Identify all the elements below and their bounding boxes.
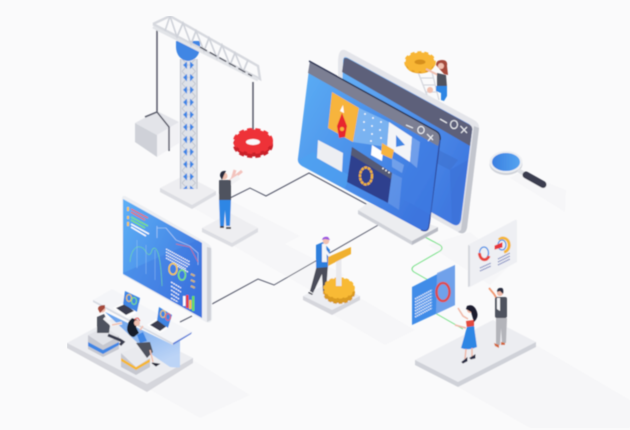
blue ring card bbox=[412, 265, 455, 325]
person looking at gear bbox=[219, 170, 242, 229]
crane bbox=[135, 16, 260, 189]
bar chart bbox=[183, 295, 194, 311]
back window controls bbox=[440, 119, 467, 133]
small cards bbox=[371, 143, 404, 173]
floor shadows bbox=[147, 172, 630, 428]
woman presenting bbox=[455, 305, 478, 363]
mini legend bbox=[191, 274, 195, 288]
front window controls bbox=[406, 125, 433, 141]
yellow gear bbox=[406, 52, 434, 74]
donut right bbox=[495, 238, 509, 252]
person platform near crane bbox=[202, 213, 258, 247]
yellow gear bbox=[324, 278, 354, 303]
desk bbox=[93, 289, 192, 368]
dark code window bbox=[347, 147, 392, 203]
crossbar bbox=[328, 247, 351, 266]
woman on ladder bbox=[426, 60, 448, 101]
play card bbox=[387, 122, 420, 168]
caption lines bbox=[480, 253, 510, 271]
post bbox=[336, 256, 342, 286]
desk cable bbox=[180, 316, 192, 322]
worker with gear machine bbox=[308, 237, 354, 303]
text block bbox=[166, 249, 190, 272]
donut charts bbox=[169, 264, 186, 280]
tower mast bbox=[180, 59, 198, 189]
analytics board bbox=[122, 196, 212, 323]
bell chart bbox=[130, 240, 162, 286]
red gear bbox=[234, 130, 272, 156]
monitor stand bbox=[358, 203, 438, 245]
crane platform bbox=[160, 175, 216, 209]
chart card bbox=[468, 220, 517, 287]
front monitor window bbox=[298, 61, 440, 231]
gear cable bbox=[252, 82, 254, 140]
block cable bbox=[145, 29, 169, 151]
network wire lower bbox=[212, 224, 380, 304]
magnifying glass bbox=[490, 151, 543, 184]
network wire upper bbox=[230, 173, 368, 205]
blue stool bbox=[88, 327, 119, 357]
man presenting bbox=[489, 288, 507, 348]
jib bbox=[153, 16, 260, 80]
left laptop bbox=[113, 291, 140, 318]
gear carried on ladder bbox=[406, 52, 448, 101]
line chart bbox=[157, 226, 198, 265]
yellow gear machine platform bbox=[303, 282, 360, 315]
presentation platform bbox=[415, 320, 536, 387]
seated woman bbox=[127, 318, 159, 366]
yellow art card bbox=[328, 92, 359, 142]
concrete block bbox=[135, 111, 179, 157]
seated man bbox=[97, 305, 123, 345]
legend bars bbox=[128, 207, 149, 236]
donut left bbox=[479, 247, 489, 260]
ladder bbox=[418, 72, 439, 100]
dots panel bbox=[353, 108, 389, 147]
green connector wire bbox=[412, 236, 463, 329]
slewing unit bbox=[176, 41, 200, 61]
worker bbox=[308, 237, 331, 295]
yellow stool bbox=[121, 347, 150, 375]
back monitor bbox=[338, 50, 479, 233]
white panel bbox=[317, 140, 343, 172]
desk platform bbox=[67, 318, 193, 392]
rocket icon bbox=[337, 105, 347, 138]
right laptop bbox=[147, 307, 172, 333]
